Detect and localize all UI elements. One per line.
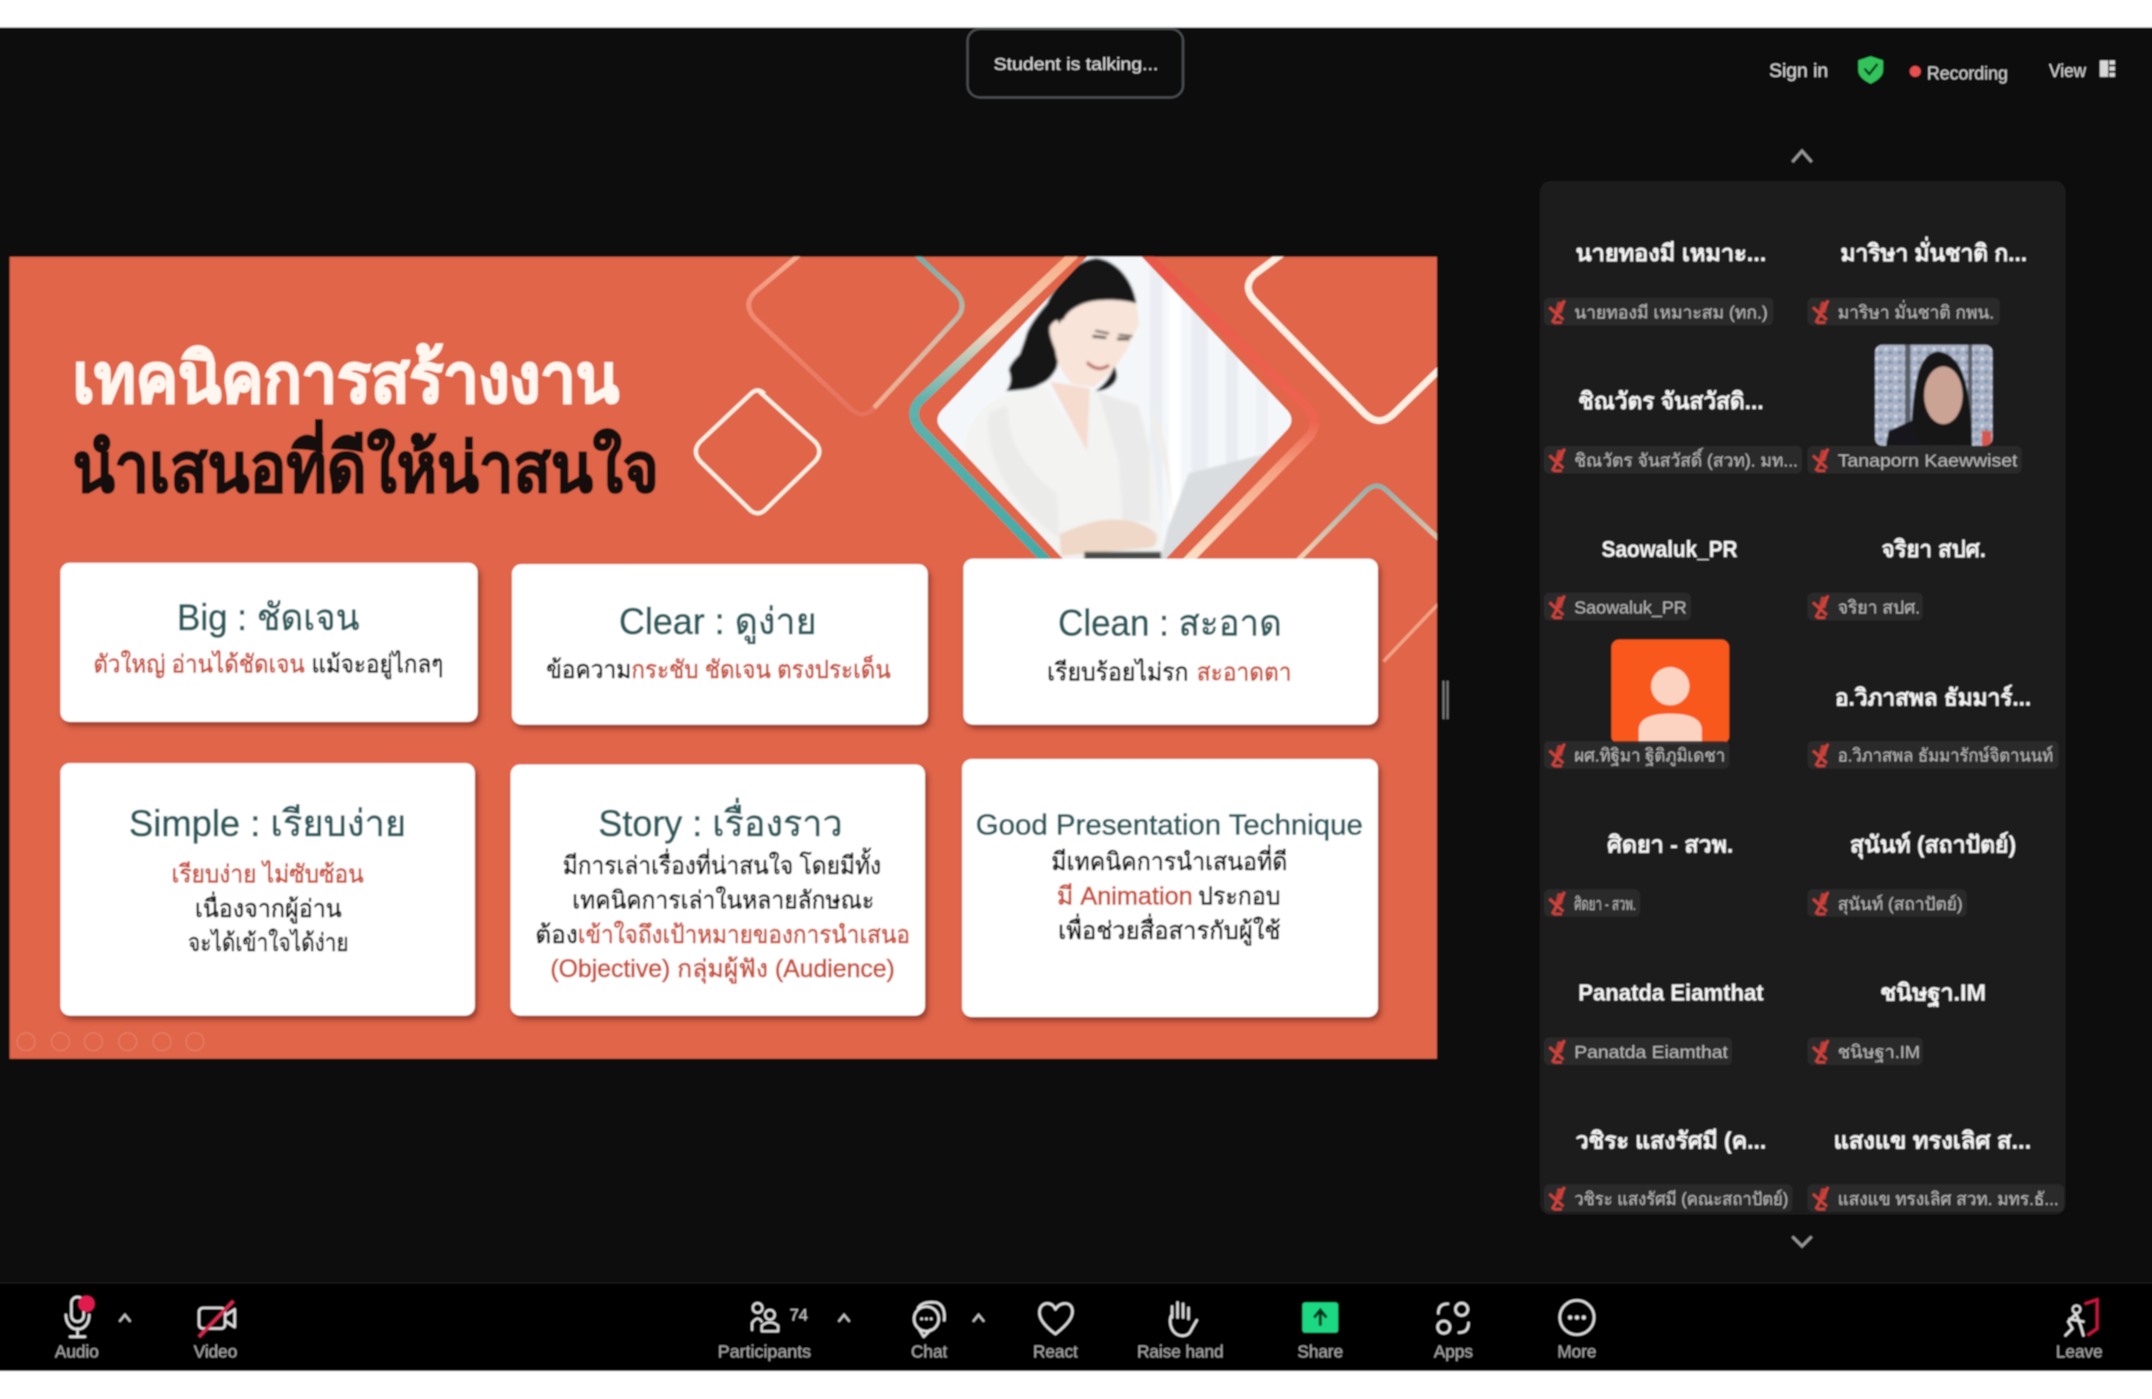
participant names: row 2: ชิณวัตร จันสวัสดิ... [1578,388,1764,414]
icon: security shield [1858,56,1883,84]
top white band [0,0,2152,27]
top right status bar: View [2049,60,2087,81]
card: Story: เข้าใจถึงเป้าหมายของการนำเสนอ [578,921,910,949]
icon: view grid [2100,60,2115,77]
participants gallery panel [1540,181,2066,1215]
participant video: Tanaporn [1875,344,1993,446]
card: Clear: กระชับ ชัดเจน ตรงประเด็น [631,654,891,684]
card: Story [511,764,925,1016]
active speaker notice: Student is talking... [994,54,1158,74]
card: Good Presentation Technique: มีเทคนิคการนำเสนอที่ดี [1051,844,1287,876]
card: Story: เทคนิคการเล่าในหลายลักษณะ [572,887,874,915]
video button [194,1301,237,1361]
audio options chevron [119,1315,130,1322]
more button [1557,1300,1596,1361]
participant names: row 6 [1544,980,1986,1065]
participant names: row 5: สุนันท์ (สถาปัตย์) [1850,831,2016,859]
title: นำเสนอที่ดีให้น่าสนใจ [73,419,659,506]
presentation slide [10,220,1444,1059]
scroll down button [1748,1215,1858,1270]
chat button [911,1302,947,1361]
participant names: row 6: ชนิษฐา.IM [1838,1042,1920,1063]
panel splitter [1442,681,1449,719]
participant names: row 2 [1544,388,2022,473]
participant names: row 7: วชิระ แสงรัศมี (ค... [1576,1128,1766,1154]
participant names: row 3: จริยา สปศ. [1838,597,1920,617]
card: Good Presentation Technique: มี Animation [1057,882,1193,910]
top right status bar: Sign in [1769,61,1828,82]
participant names: row 5: ศิดยา - สวพ. [1607,831,1733,857]
participant names: row 5 [1544,831,2016,917]
card: Simple: จะได้เข้าใจได้ง่าย [188,929,349,957]
photo: woman working on a laptop [936,255,1293,560]
participant names: row 4: ผศ.ทิฐิมา ฐิติภูมิเดชา [1574,746,1725,767]
card: Clear: Clear : ดูง่าย [619,600,817,644]
card: Clean: เรียบร้อยไม่รก [1047,659,1189,687]
participant names: row 6: Panatda Eiamthat [1578,980,1764,1006]
participants button: 74 [790,1306,808,1324]
react button: React [1033,1341,1078,1361]
scroll up button [1748,130,1858,181]
title [73,340,659,506]
chat options chevron [973,1315,984,1322]
participant names: row 3: Saowaluk_PR [1574,597,1687,618]
decorative diamond outlines [696,254,1444,662]
participants button: Participants [718,1341,811,1361]
participant names: row 1: มาริษา มั่นชาติ ก... [1840,236,2027,266]
card: Clear: ข้อความ [546,657,631,684]
card: Story: ต้อง [535,922,578,949]
card: Good Presentation Technique: ประกอบ [1198,883,1280,910]
participants options chevron [839,1315,850,1322]
card: Story: มีการเล่าเรื่องที่น่าสนใจ โดยมีทั้ง [563,848,881,880]
card: Clean: Clean : สะอาด [1058,601,1282,643]
card: Big: Big : ชัดเจน [177,596,360,638]
video button: Video [194,1341,237,1361]
card: Good Presentation Technique: Good Presentation Technique [976,809,1363,841]
participant names: row 1 [1544,236,2027,325]
share button: Share [1297,1341,1343,1361]
participant names: row 7 [1544,1128,2064,1212]
participant names: row 6: ชนิษฐา.IM [1880,980,1986,1009]
card: Story: (Objective) กลุ่มผู้ฟัง (Audience) [550,956,895,984]
chat button: Chat [911,1341,947,1361]
card: Simple [60,763,475,1016]
participant names: row 5: ศิดยา - สวพ. [1574,894,1636,914]
card: Clean [963,559,1378,725]
participant names: row 4: อ.วิภาสพล ธัมมาร์... [1835,684,2031,710]
participant names: row 3: Saowaluk_PR [1602,536,1738,562]
leave button [2056,1300,2103,1361]
leave button: Leave [2056,1341,2103,1361]
participants button [718,1303,811,1361]
participant avatar: orange [1611,640,1729,748]
participant names: row 1: นายทองมี เหมาะสม (ทก.) [1574,302,1768,322]
participant names: row 3 [1544,536,1986,620]
participant names: row 4: อ.วิภาสพล ธัมมารักษ์จิตานนท์ [1838,746,2053,766]
participant names: row 4 [1544,684,2059,769]
card: Big [60,563,478,722]
participant names: row 1: มาริษา มั่นชาติ กพน. [1838,299,1994,322]
participant names: row 7: แสงแข ทรงเลิศ สวท. มทร.ธั... [1838,1189,2059,1209]
participant names: row 7: วชิระ แสงรัศมี (คณะสถาปัตย์) [1574,1189,1788,1209]
card: Simple: เรียบง่าย ไม่ซับซ้อน [172,860,364,888]
active speaker notice [968,29,1183,97]
raise hand button [1137,1302,1224,1361]
card: Clean: สะอาดตา [1197,660,1291,687]
card: Good Presentation Technique [962,759,1378,1017]
recording indicator: Recording [1927,63,2008,84]
participant names: row 6: Panatda Eiamthat [1574,1042,1728,1062]
bottom toolbar [0,1283,2152,1371]
participant names: row 7: แสงแข ทรงเลิศ ส... [1834,1128,2031,1154]
card: Simple: เนื่องจากผู้อ่าน [195,891,342,924]
top right status bar [1747,49,2138,91]
slide navigation controls [17,1033,204,1051]
title: เทคนิคการสร้างงาน [73,340,619,417]
more button: More [1557,1341,1596,1361]
participant names: row 5: สุนันท์ (สถาปัตย์) [1838,894,1963,915]
apps button [1434,1303,1473,1361]
audio button [55,1296,99,1361]
participant names: row 1: นายทองมี เหมาะ... [1576,240,1766,266]
card: Simple: Simple : เรียบง่าย [129,802,406,844]
card: Big: แม้จะอยู่ไกลๆ [312,650,443,679]
raise hand button: Raise hand [1137,1341,1224,1361]
bottom white band [0,1371,2152,1399]
card: Big: ตัวใหญ่ อ่านได้ชัดเจน [93,650,305,678]
card: Good Presentation Technique: เพื่อช่วยสื่อสารกับผู้ใช้ [1058,913,1280,946]
participant names: row 2: ชิณวัตร จันสวัสดิ์ (สวท). มท... [1574,448,1798,471]
card: Clear [512,564,928,725]
audio button: Audio [55,1341,99,1361]
react button [1033,1303,1078,1361]
apps button: Apps [1434,1341,1473,1361]
participant names: row 3: จริยา สปศ. [1882,536,1986,562]
photo frame strokes [914,254,1314,563]
card: Story: Story : เรื่องราว [598,797,843,844]
participant names: row 2: Tanaporn Kaewwiset [1838,451,2018,471]
share button [1297,1302,1343,1361]
